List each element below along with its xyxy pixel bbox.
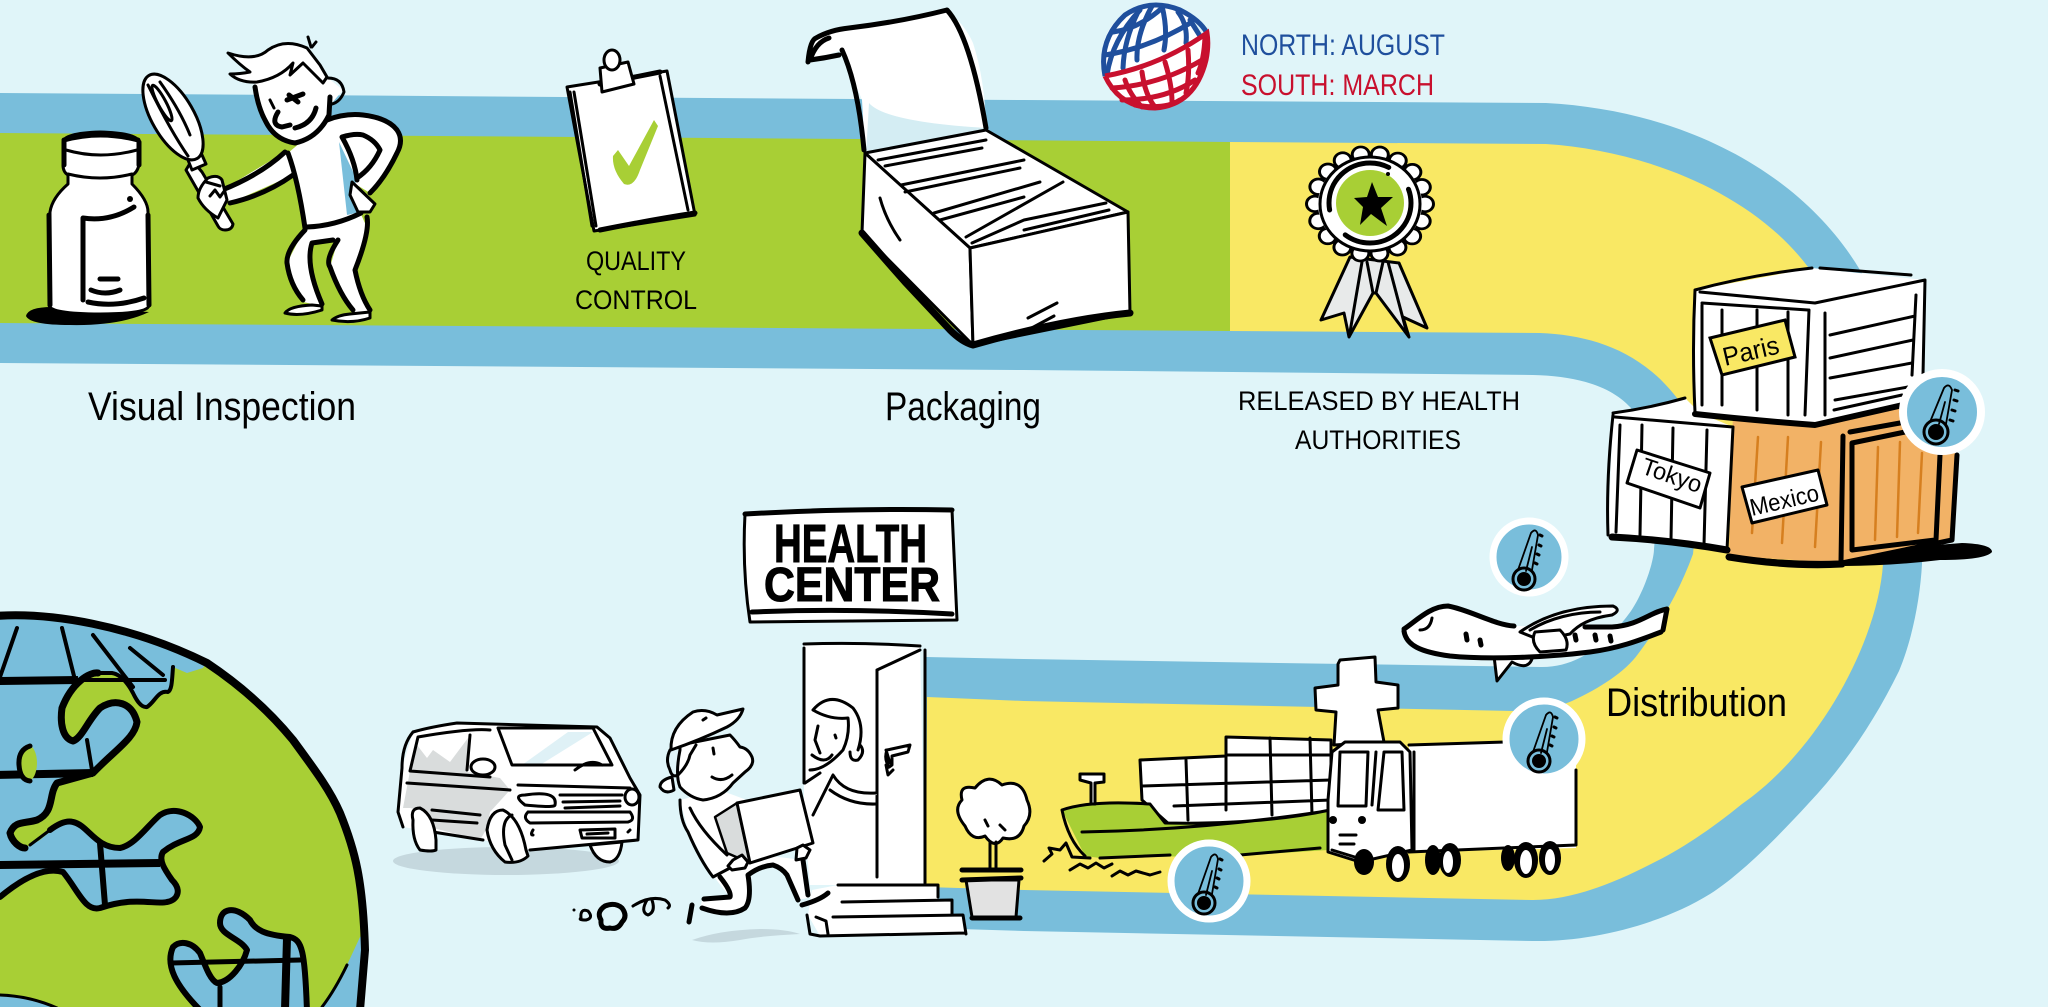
icon: plane bbox=[1404, 606, 1667, 681]
ship tower bbox=[1315, 657, 1398, 745]
icon: clipboard with check bbox=[567, 50, 695, 231]
shoes bbox=[689, 893, 828, 922]
icon: potted plant bbox=[958, 779, 1030, 918]
sign: health center: CENTER bbox=[764, 559, 940, 612]
ocean: south bbox=[170, 910, 307, 1007]
crate: Paris: Paris bbox=[1720, 330, 1782, 372]
ribbons bbox=[1321, 257, 1427, 337]
character: man with magnifying glass bbox=[131, 37, 400, 322]
man's feet bbox=[285, 305, 370, 322]
containers bbox=[1140, 737, 1331, 825]
scallops bbox=[1315, 154, 1425, 254]
icon: truck bbox=[1328, 742, 1576, 882]
man's left hand bbox=[198, 176, 227, 218]
ocean: north and central bbox=[0, 619, 204, 906]
label: visual inspection: Visual Inspection bbox=[88, 385, 356, 429]
label: shipping dates by hemisphere: NORTH: AUGUST bbox=[1241, 29, 1445, 62]
man's torso and arms bbox=[222, 115, 400, 227]
icon: approval rosette bbox=[1315, 154, 1427, 337]
label: shipping dates by hemisphere bbox=[1241, 29, 1445, 102]
label: released by health authorities: AUTHORITIES bbox=[1295, 425, 1461, 455]
latitude and meridian lines bbox=[0, 680, 160, 865]
road: process path bbox=[0, 93, 1922, 941]
label: distribution: Distribution bbox=[1606, 681, 1787, 725]
crate: Tokyo: Tokyo bbox=[1638, 453, 1705, 499]
thermometer badge: crates bbox=[1903, 373, 1981, 451]
hull bbox=[1062, 803, 1330, 858]
crate: Mexico bbox=[1729, 395, 1957, 565]
icon: van bbox=[393, 723, 640, 875]
icon: large globe bbox=[0, 600, 372, 1007]
ocean: east and south-west bbox=[324, 936, 361, 1007]
icon: magnifying glass bbox=[131, 65, 233, 230]
man's right hand bbox=[350, 182, 375, 212]
label: packaging: Packaging bbox=[885, 385, 1041, 429]
health center door and steps bbox=[804, 643, 966, 936]
label: released by health authorities bbox=[1238, 386, 1520, 455]
icon: packaging box with leaflet bbox=[808, 10, 1130, 345]
icon: vial bbox=[26, 132, 149, 325]
label: quality control: CONTROL bbox=[575, 285, 697, 315]
torso bbox=[680, 790, 760, 877]
crate: Paris bbox=[1694, 268, 1925, 425]
crate: Mexico: Mexico bbox=[1747, 480, 1822, 522]
character: delivery man bbox=[660, 709, 828, 922]
crate: Tokyo bbox=[1608, 398, 1733, 550]
thermometer badge: ship bbox=[1171, 843, 1247, 919]
steps bbox=[807, 885, 966, 936]
thermometer badge: plane bbox=[1493, 521, 1565, 593]
sign: health center: HEALTH bbox=[774, 514, 927, 574]
mast bbox=[1080, 774, 1104, 804]
lake: small bbox=[21, 747, 37, 780]
sign: health center bbox=[744, 510, 957, 622]
head bbox=[678, 735, 753, 800]
waves bbox=[1044, 843, 1160, 876]
hands bbox=[728, 845, 810, 870]
head bbox=[255, 50, 343, 143]
character: woman at door bbox=[805, 699, 877, 815]
crate shadow bbox=[1845, 543, 1992, 566]
ground shadow bbox=[692, 929, 800, 942]
thermometer badge: truck bbox=[1506, 701, 1582, 777]
coastline bbox=[10, 673, 137, 848]
legs bbox=[700, 850, 812, 913]
van wheels bbox=[412, 808, 436, 851]
icon: small globe bbox=[1102, 4, 1208, 108]
door handle bbox=[886, 745, 910, 775]
dust cloud bbox=[572, 898, 669, 928]
parcel bbox=[715, 803, 750, 863]
icon: ship bbox=[1044, 657, 1398, 876]
label: released by health authorities: RELEASED BY HEALTH bbox=[1238, 386, 1520, 416]
crates bbox=[1608, 268, 1992, 566]
label: shipping dates by hemisphere: SOUTH: MARCH bbox=[1241, 69, 1434, 102]
man's legs bbox=[287, 212, 370, 312]
label: quality control: QUALITY bbox=[586, 246, 686, 276]
label: quality control bbox=[575, 246, 697, 315]
